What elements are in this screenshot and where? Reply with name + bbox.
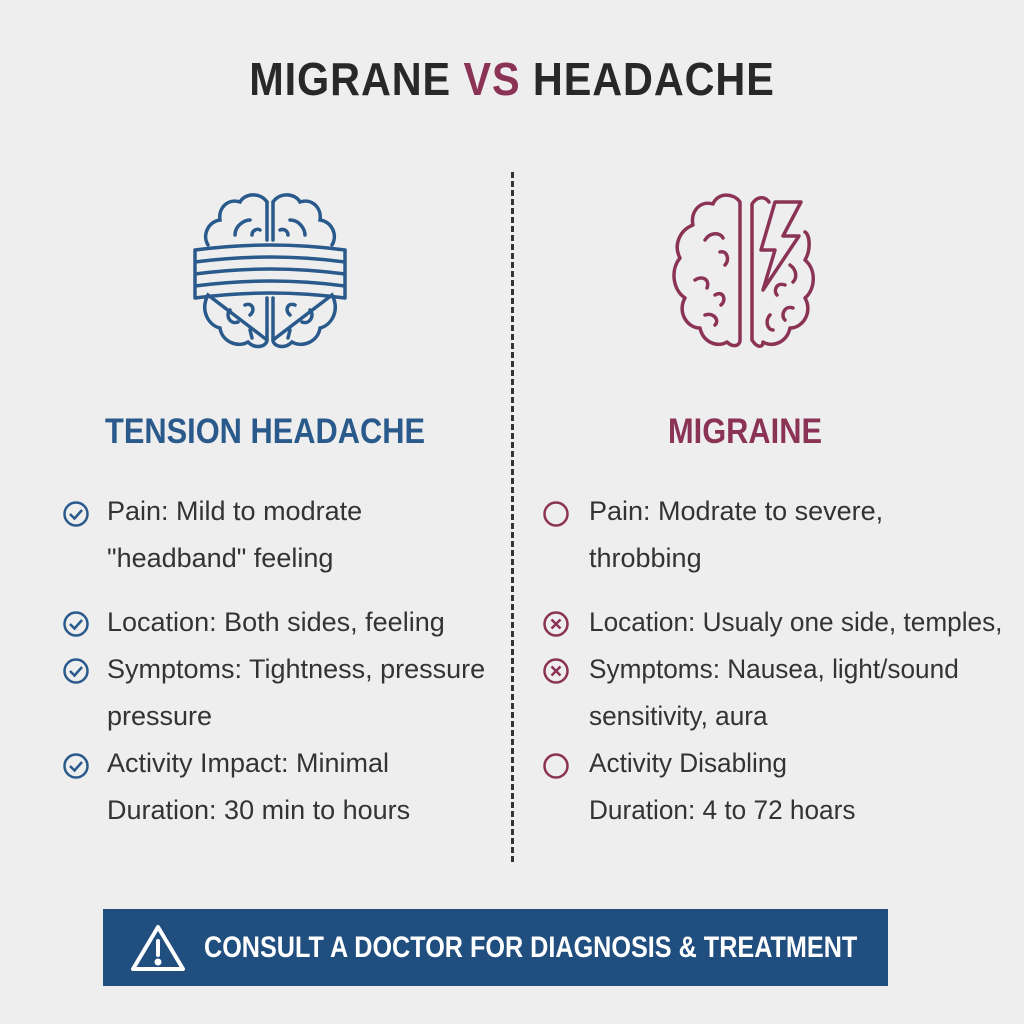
- list: migraine: [543, 496, 1002, 825]
- text: "headband" feeling: [107, 543, 333, 573]
- text: Duration: 4 to 72 hoars: [589, 795, 855, 825]
- banner: consult doctor: [103, 909, 888, 986]
- text: Duration: 30 min to hours: [107, 795, 410, 825]
- text: pressure: [107, 701, 212, 731]
- icon: warning: [131, 924, 186, 971]
- text: Symptoms: Nausea, light/sound: [589, 654, 959, 684]
- text: sensitivity, aura: [589, 701, 768, 731]
- text: Pain: Modrate to severe,: [589, 496, 883, 526]
- heading: migraine: MIGRAINE: [668, 412, 822, 451]
- text: Activity Disabling: [589, 748, 787, 778]
- text: throbbing: [589, 543, 702, 573]
- text: Activity Impact: Minimal: [107, 748, 389, 778]
- text: Pain: Mild to modrate: [107, 496, 362, 526]
- list: tension: [63, 496, 485, 825]
- title: MIGRANE VS HEADACHE: [249, 53, 775, 105]
- divider dashed: [511, 172, 514, 862]
- icon: brain with headband: [193, 193, 347, 348]
- text: Location: Both sides, feeling: [107, 607, 445, 637]
- text: Symptoms: Tightness, pressure: [107, 654, 485, 684]
- heading: tension headache: TENSION HEADACHE: [105, 412, 425, 451]
- banner: consult doctor: CONSULT A DOCTOR FOR DIAGNOSIS & TREATMENT: [204, 931, 857, 964]
- text: Location: Usualy one side, temples,: [589, 607, 1002, 637]
- icon: brain with lightning: [672, 193, 815, 348]
